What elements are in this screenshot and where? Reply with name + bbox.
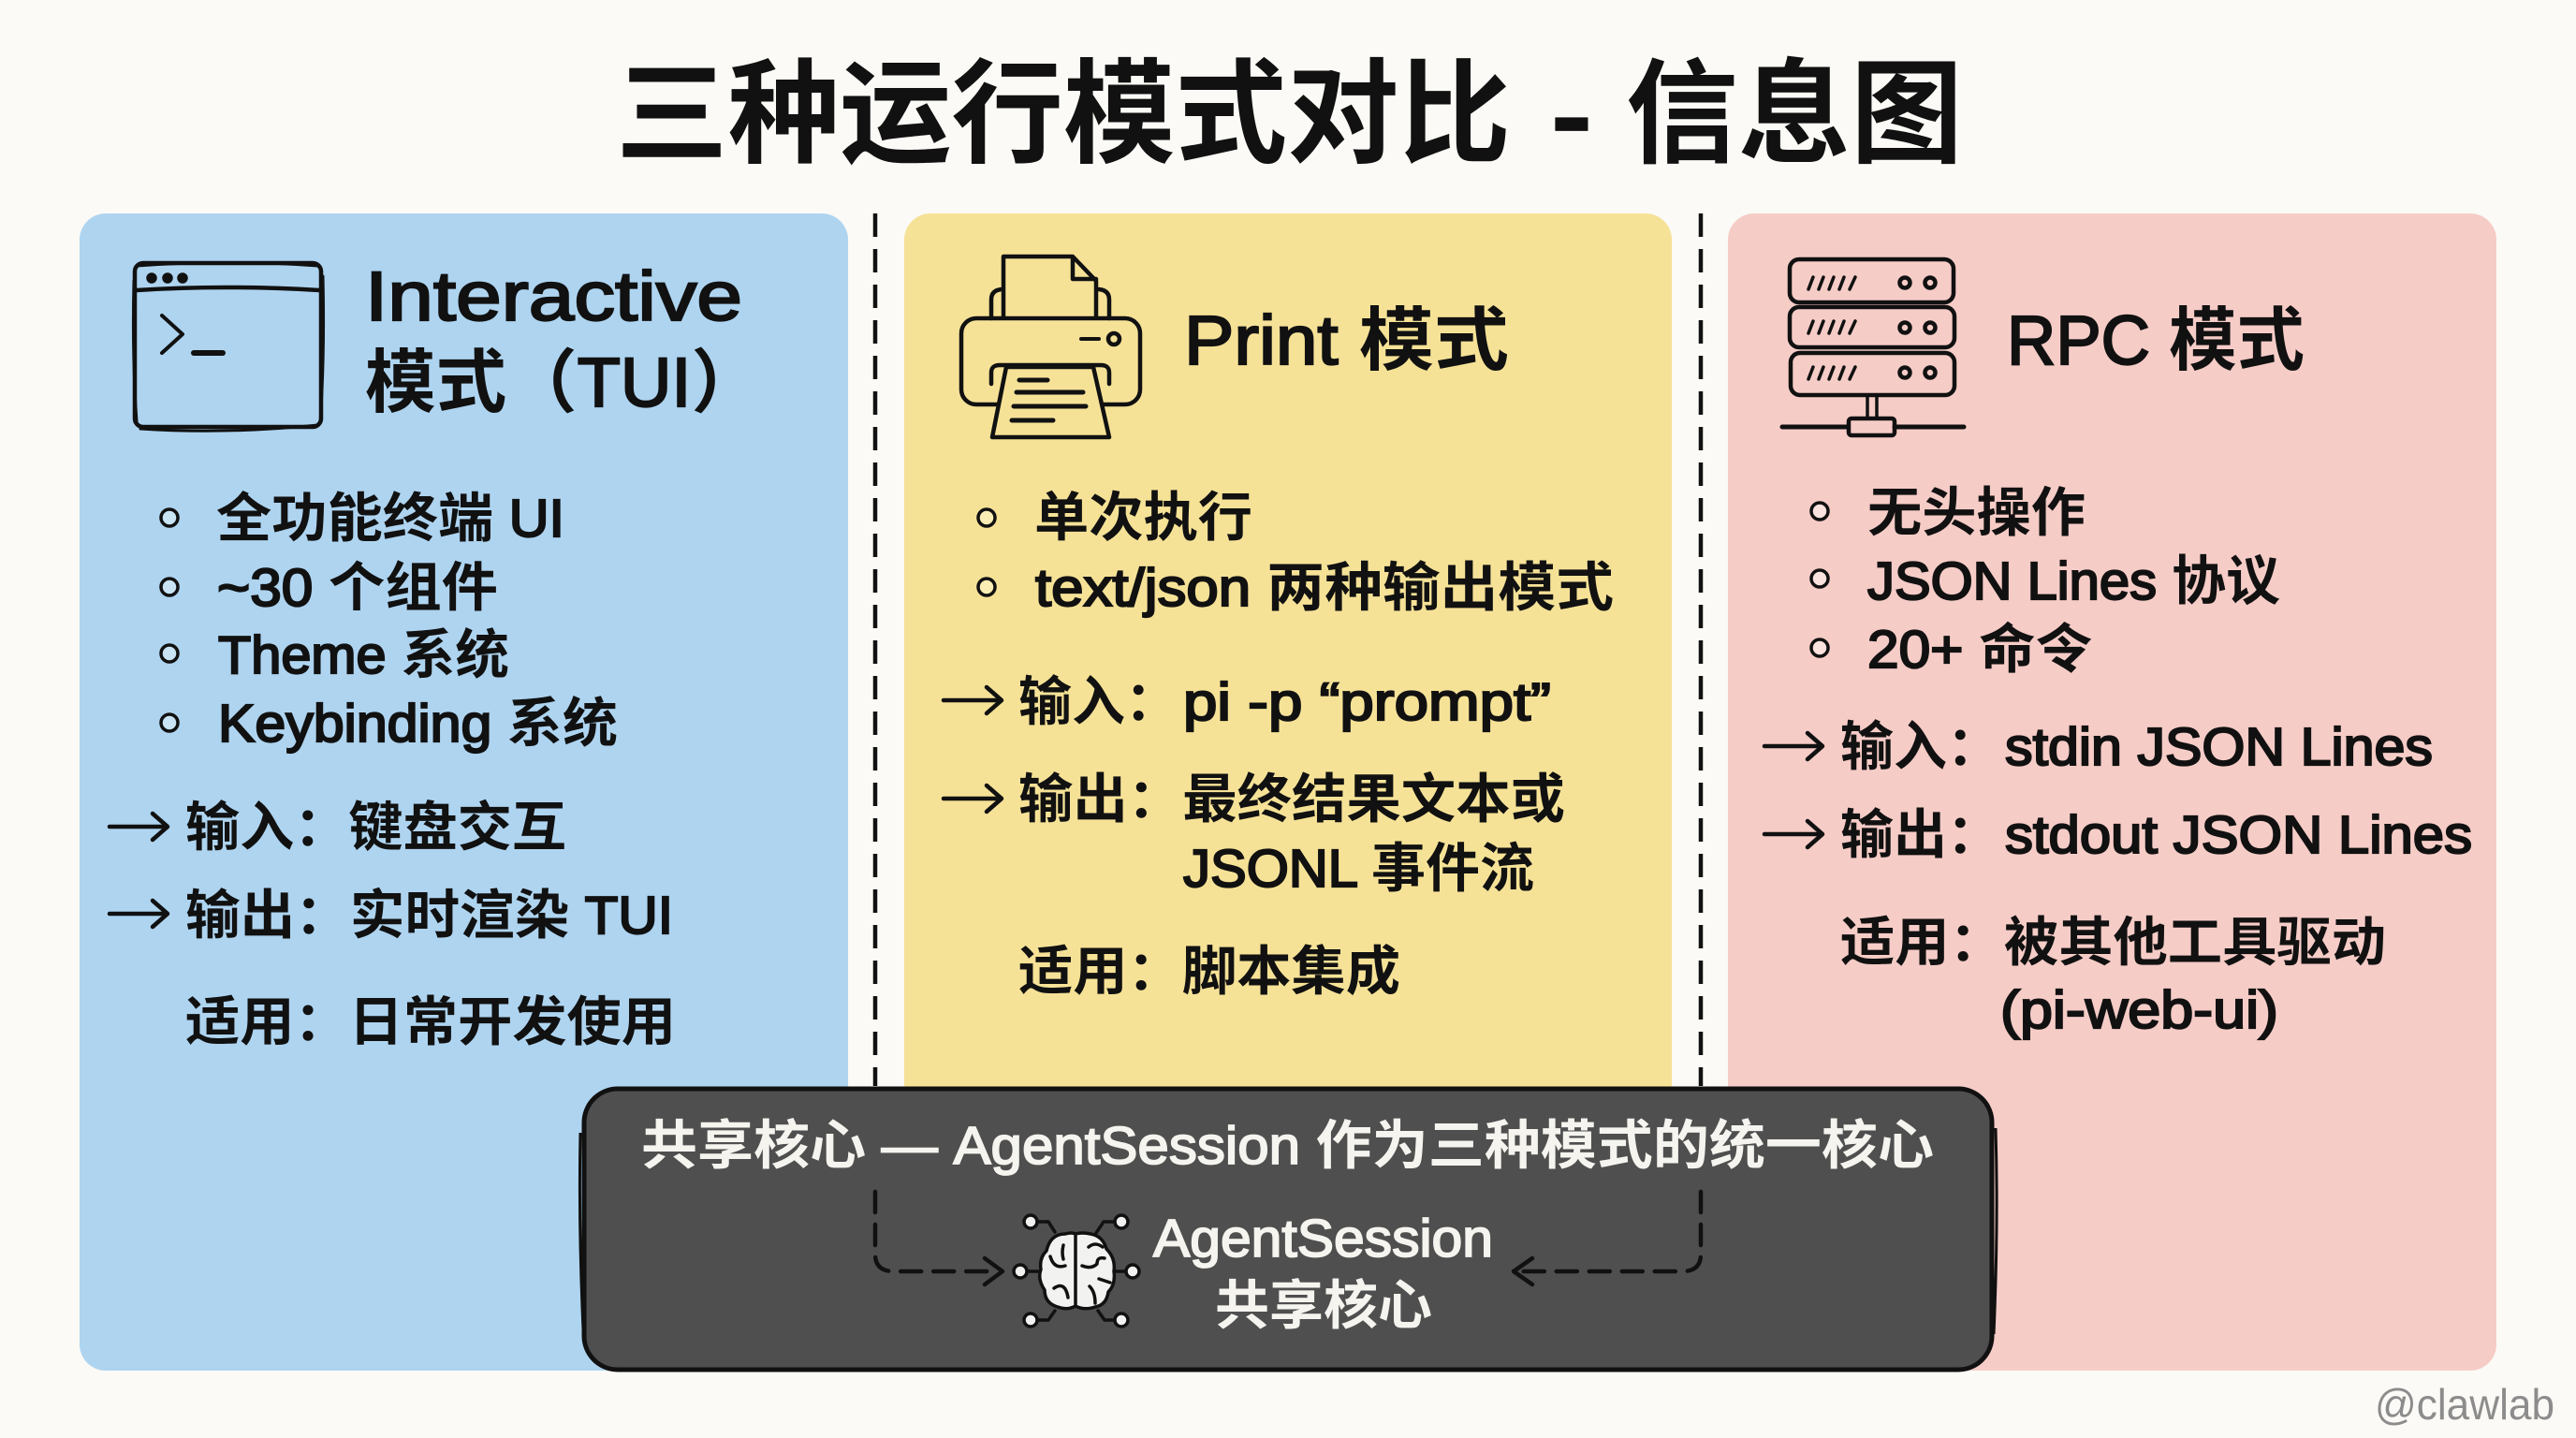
feature list: JSON Lines 协议 [1867,551,2280,611]
heading: Interactive: 模式（TUI） [365,344,762,421]
feature list [1811,483,2280,680]
input and output rows: 适用：日常开发使用 [185,992,676,1052]
heading: RPC: RPC 模式 [2007,301,2305,379]
input and output rows [110,798,676,1052]
dashed dividers [875,213,1701,1086]
panel: shared core [579,1089,1997,1370]
core label [1153,1209,1493,1336]
input and output rows [1764,717,2472,1040]
panel: Interactive [80,213,848,1371]
feature list: text/json 两种输出模式 [1035,558,1614,618]
icon: server rack [1782,259,1964,435]
icon: printer [961,257,1140,437]
input and output rows: (pi-web-ui) [2000,980,2278,1040]
title: - [1550,51,1593,178]
feature list: 全功能终端 UI [216,489,564,549]
heading: Print: Print 模式 [1184,301,1509,379]
feature list: 20+ 命令 [1867,620,2092,680]
input and output rows: 输入：键盘交互 [185,798,566,858]
input and output rows: 输入： [1840,717,2000,777]
panel: RPC [1728,213,2496,1371]
heading: Interactive: Interactive [365,257,742,335]
dashed arrow: right [1514,1192,1701,1284]
heading: Interactive [365,257,762,421]
feature list: 无头操作 [1867,483,2086,543]
input and output rows: 输出：最终结果文本或 [1018,770,1565,829]
feature list: Keybinding 系统 [218,694,618,754]
core label: AgentSession [1153,1209,1493,1269]
input and output rows [944,672,1565,1002]
shared core heading: 共享核心 — AgentSession 作为三种模式的统一核心 [641,1116,1934,1176]
feature list: ~30 个组件 [217,558,498,618]
dashed arrow: left [875,1192,1003,1284]
input and output rows: stdin JSON Lines [2005,717,2433,777]
input and output rows: 输出： [1840,805,2000,865]
title [616,51,1963,178]
title: 信息图 [1626,51,1963,178]
feature list: 单次执行 [1034,488,1252,548]
feature list [978,488,1614,618]
icon: terminal window [133,262,324,431]
title: 三种运行模式对比 [616,51,1511,178]
watermark: @clawlab [2375,1380,2554,1429]
input and output rows: pi -p “prompt” [1183,672,1551,732]
feature list: Theme 系统 [218,625,509,685]
core label: 共享核心 [1215,1276,1432,1336]
input and output rows: stdout JSON Lines [2005,805,2472,865]
input and output rows: 输出：实时渲染 TUI [185,886,673,946]
feature list [161,489,618,754]
icon: brain with nodes [1014,1215,1139,1327]
input and output rows: JSONL 事件流 [1183,839,1534,899]
panel: Print [904,213,1672,1371]
input and output rows: 输入： [1018,672,1178,732]
input and output rows: 适用：脚本集成 [1018,942,1400,1002]
input and output rows: 适用：被其他工具驱动 [1840,913,2386,973]
